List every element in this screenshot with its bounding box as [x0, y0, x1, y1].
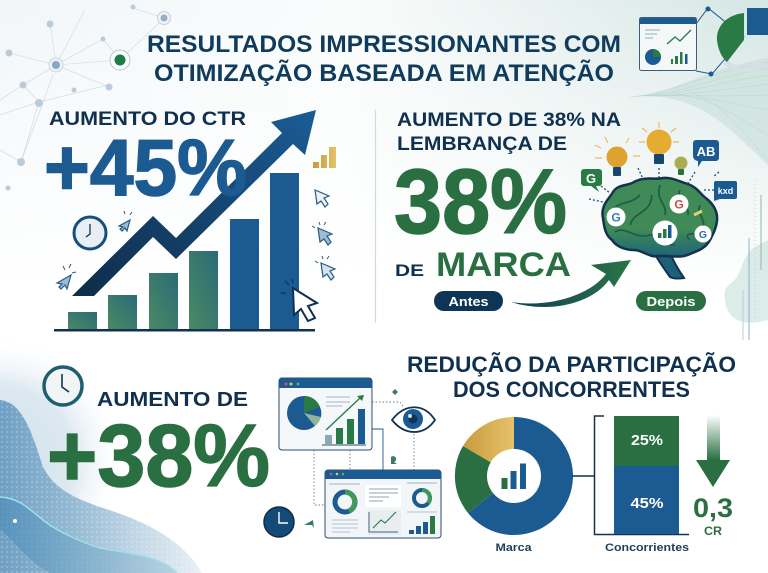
stat: 0,3 CR: [693, 493, 733, 538]
stat: 0,3 CR: 0,3: [693, 493, 733, 523]
stat: +45%: +45%: [44, 123, 247, 212]
stacked bar: concorrentes: 45%: [630, 496, 664, 512]
label: concorrentes: Concorrientes: [605, 542, 689, 554]
connector bracket: [572, 416, 689, 534]
panel: CTR increase: [44, 109, 336, 332]
pill: antes: [434, 291, 503, 311]
stat: +38%: +38%: [47, 406, 270, 505]
background network top left: [0, 4, 170, 190]
stacked bar: concorrentes: 25%: [631, 433, 663, 449]
background shapes right side: [725, 180, 768, 340]
dashboard bottom: [325, 470, 441, 538]
icons: small cursors: [57, 190, 335, 289]
pill: antes: Antes: [448, 295, 489, 309]
icon: bubble G: [581, 169, 602, 192]
icon: eye: [392, 407, 435, 432]
pill: depois: Depois: [646, 295, 696, 309]
icon: small marks: [304, 389, 398, 528]
icon: large cursor: [281, 279, 317, 321]
heading: redução da participação dos concorrentes: REDUÇÃO DA PARTICIPAÇÃO: [407, 352, 736, 377]
arrow: down: [696, 415, 730, 487]
panel: brand recall: [394, 110, 737, 311]
heading: aumento de 38% na lembrança de: AUMENTO DE 38% NA: [397, 110, 621, 131]
heading: redução da participação dos concorrentes: DOS CONCORRENTES: [453, 377, 690, 402]
title: RESULTADOS IMPRESSIONANTES COM: [147, 31, 621, 58]
icons: light bulbs: [595, 122, 688, 176]
heading: de marca: DE: [395, 261, 424, 280]
connectors: [314, 402, 414, 505]
icon: brain: [602, 178, 717, 279]
panel: competitor share reduction: [407, 352, 736, 554]
stacked bar: concorrentes: [614, 416, 679, 534]
icon: brain: G: [674, 198, 684, 212]
icon: brain: G: [699, 229, 707, 241]
stat: 38%: 38%: [394, 151, 567, 253]
pill: depois: [636, 291, 706, 311]
icon: bubble AB: [693, 140, 719, 167]
background mesh wave top right: [630, 58, 768, 165]
icon: bubble kxd: kxd: [718, 186, 733, 196]
arrow: antes to depois: [511, 260, 631, 307]
bar chart: [54, 173, 315, 332]
icon: bubble AB: AB: [697, 144, 715, 159]
heading: aumento de 38% na lembrança de: LEMBRANÇA DE: [397, 134, 567, 155]
heading: de marca: MARCA: [436, 246, 571, 284]
heading: redução da participação dos concorrentes: [407, 352, 736, 402]
icon: dark clock: [264, 507, 294, 537]
connector dots around brain: [589, 168, 719, 202]
icon: bubble G: G: [586, 171, 596, 186]
heading: aumento de: AUMENTO DE: [97, 389, 248, 411]
icon: bubble kxd: [714, 181, 737, 201]
icon: gold bars: [313, 147, 336, 168]
icon: dashboard top right: [640, 6, 768, 76]
icon: clock: [74, 217, 106, 249]
donut chart: marca: [455, 417, 573, 535]
stat: 0,3 CR: CR: [704, 524, 722, 538]
panel: attention increase: [44, 367, 441, 538]
icon: clock: [44, 367, 82, 405]
divider: [374, 110, 376, 323]
label: marca: Marca: [496, 542, 532, 554]
arrow: growth zigzag: [72, 110, 316, 296]
title: OTIMIZAÇÃO BASEADA EM ATENÇÃO: [154, 59, 614, 87]
background wave bottom left: [0, 400, 202, 573]
title: [147, 31, 621, 87]
icon: brain: G: [611, 210, 621, 224]
heading: aumento do CTR: AUMENTO DO CTR: [49, 109, 246, 130]
dashboard top: [279, 378, 372, 450]
heading: aumento de 38% na lembrança de: [397, 110, 621, 155]
